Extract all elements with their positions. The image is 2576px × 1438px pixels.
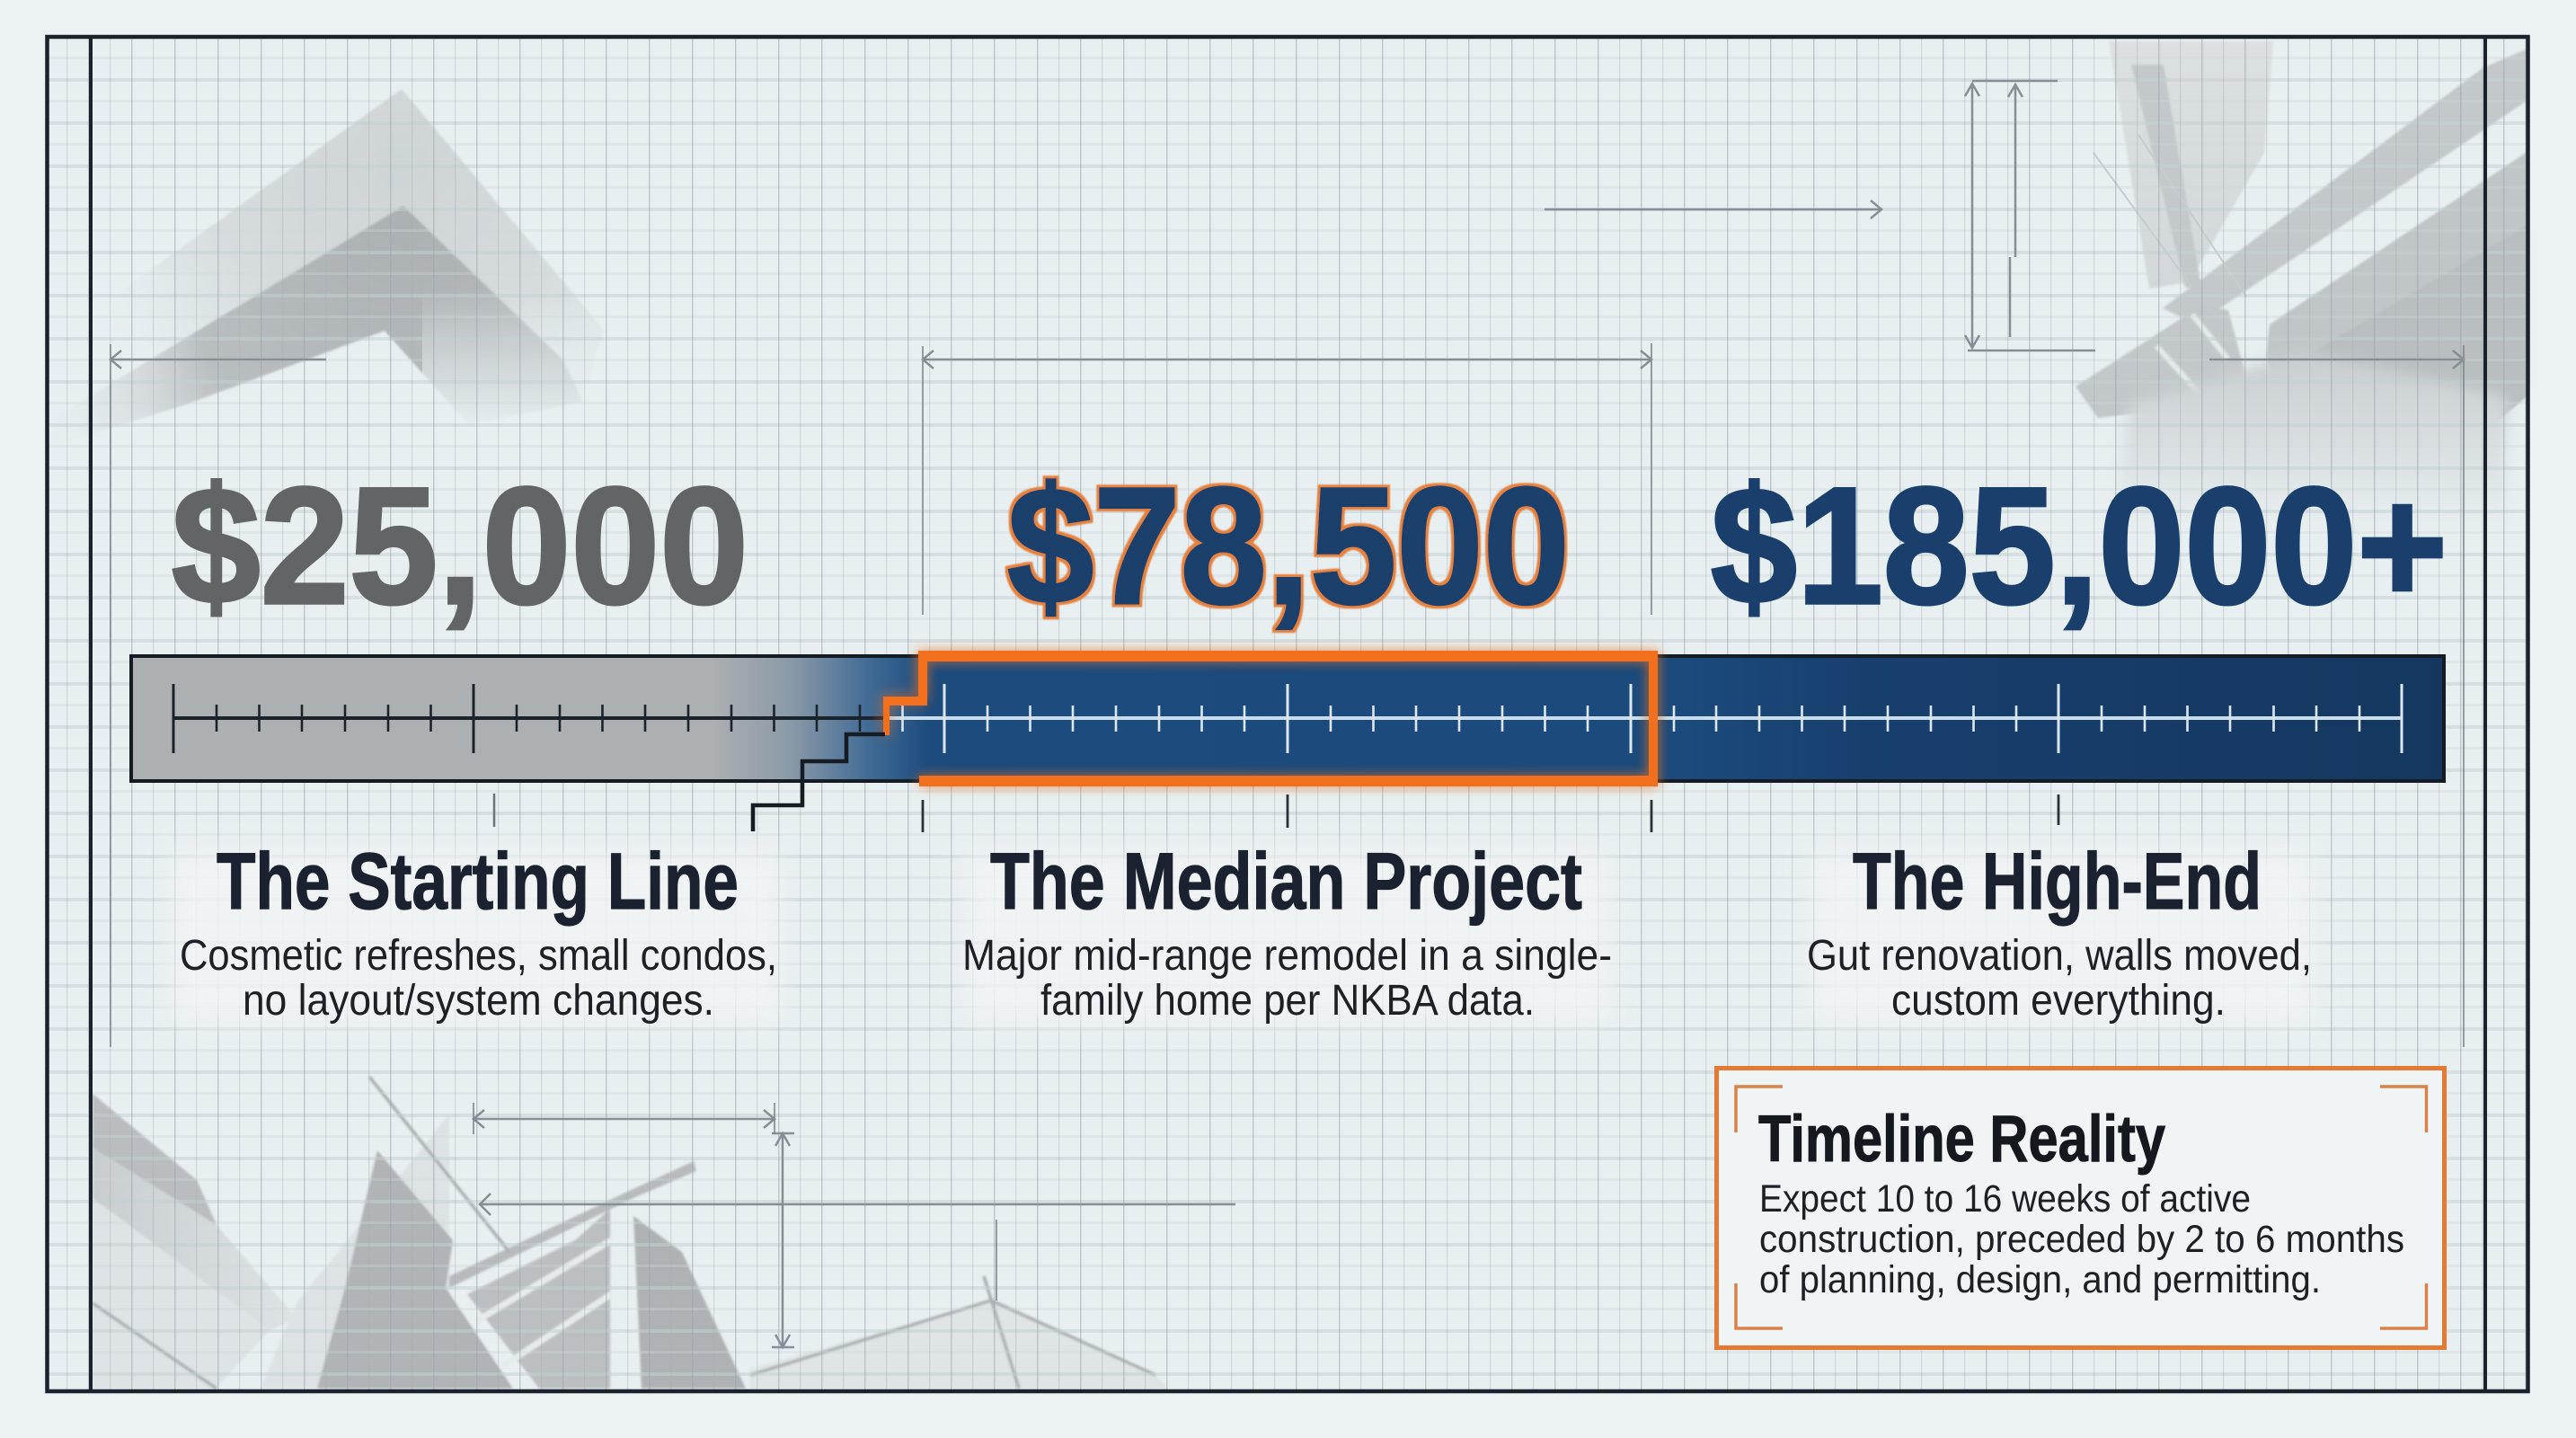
tick marks below bar [494,794,2058,832]
axis: blue section [890,684,2402,753]
price: $185,000+: $185,000+ [1711,454,2448,639]
illustration: steel frame top right [2076,41,2528,548]
callout body: construction, preceded by 2 to 6 months [1759,1218,2404,1261]
timeline bar [131,656,2444,781]
stair step line [753,734,885,831]
section: the starting line: The Starting Line [217,836,739,926]
section: the high-end [1807,836,2312,1025]
illustration: steel frame bottom left [93,1077,1168,1389]
section: the high-end: The High-End [1853,836,2262,926]
section: the starting line: no layout/system changes. [243,977,714,1025]
soft halos behind text [171,849,2314,1025]
section: the median project: family home per NKBA data. [1040,977,1535,1025]
section: the high-end: custom everything. [1891,977,2226,1025]
callout: timeline reality [1716,1068,2444,1348]
price: $78,500: $78,500 [1007,454,1570,639]
corner brackets [1736,1087,2426,1328]
callout title: Timeline Reality [1758,1103,2165,1176]
section: the median project: The Median Project [990,836,1582,926]
section: the high-end: Gut renovation, walls moved, [1807,932,2312,980]
callout body: Expect 10 to 16 weeks of active [1759,1177,2251,1221]
section: the starting line [180,836,777,1025]
callout body [1759,1177,2404,1301]
callout body: of planning, design, and permitting. [1759,1258,2321,1301]
median highlight [883,651,1658,786]
section: the median project [962,836,1612,1025]
section: the starting line: Cosmetic refreshes, small condos, [180,932,777,980]
price: $25,000: $25,000 [172,454,748,639]
illustration: roof peak top left [49,89,638,458]
section: the median project: Major mid-range remodel in a single- [962,932,1612,980]
axis: grey section [173,684,890,753]
